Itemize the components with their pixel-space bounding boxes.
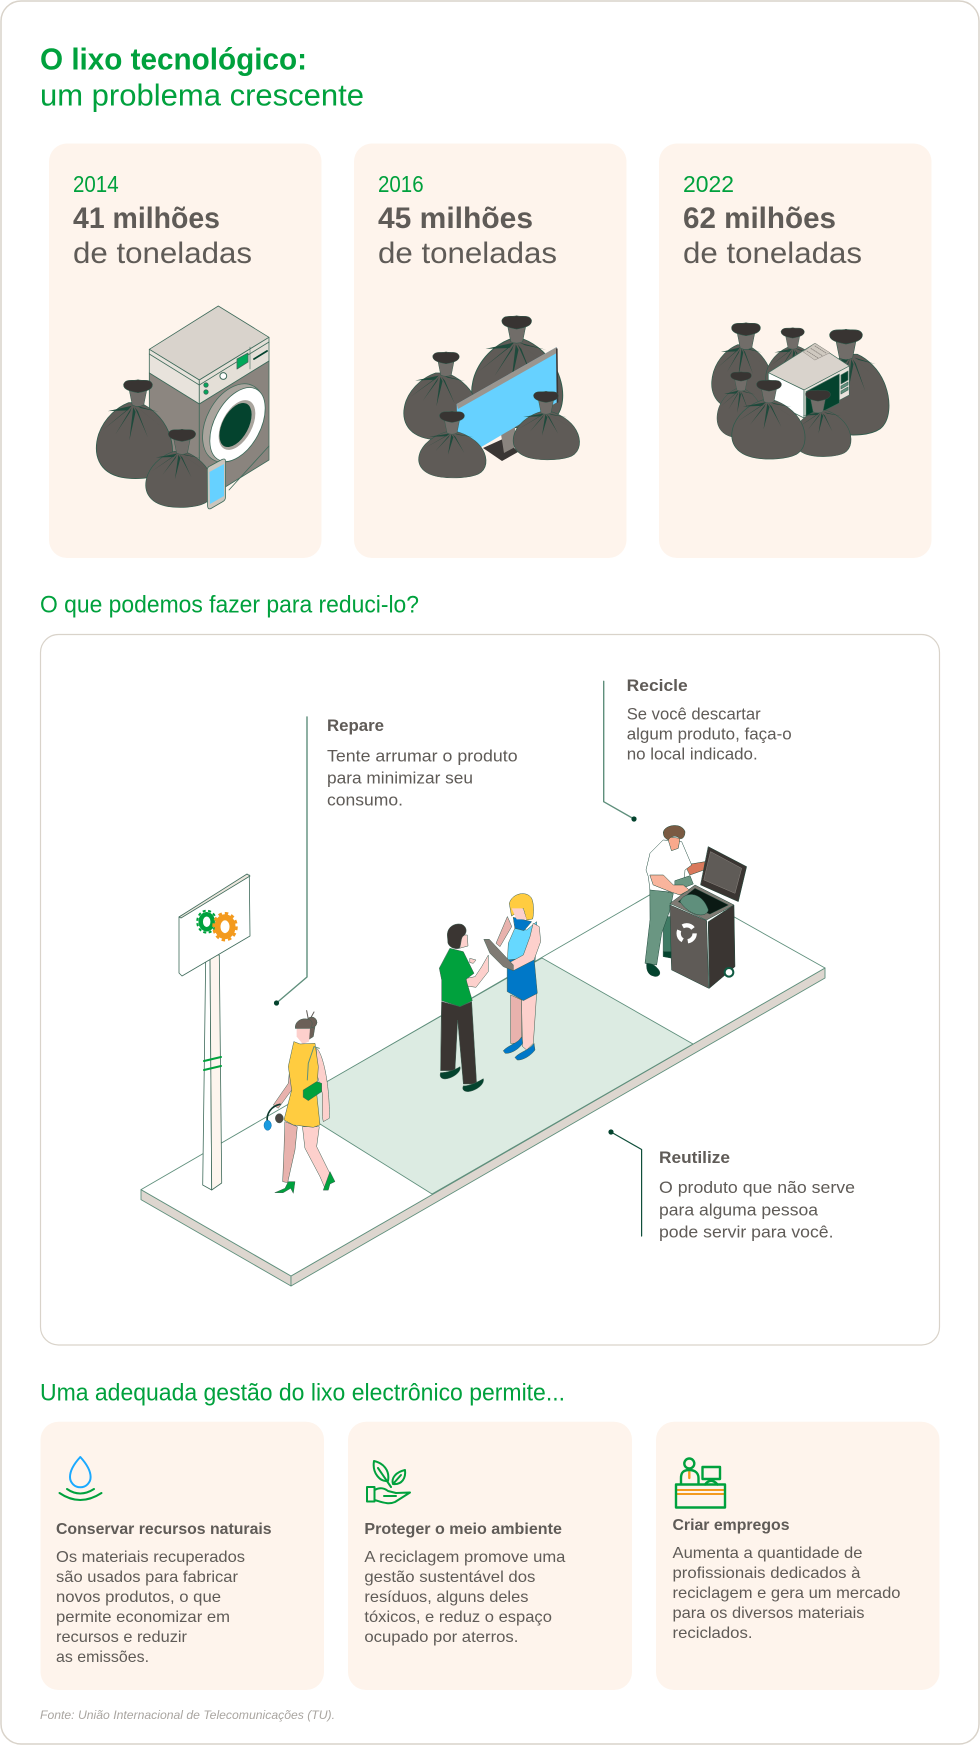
callout: repare: consumo. [327, 790, 403, 810]
callout: repare: para minimizar seu [327, 768, 473, 788]
woman with tablet [484, 894, 541, 1060]
heading: gestão: Uma adequada gestão do lixo electrônico permite... [40, 1380, 565, 1406]
bag [96, 380, 173, 479]
callout: repare: Repare [327, 716, 384, 735]
callout: repare [274, 716, 518, 1006]
panel: 2014: de toneladas [73, 237, 252, 270]
panel: 2016 [354, 144, 626, 558]
panel: conservar recursos: recursos e reduzir [56, 1629, 188, 1646]
heading: o que podemos fazer: O que podemos fazer para reduci-lo? [40, 592, 419, 618]
panel: criar empregos [656, 1422, 940, 1690]
panel: criar empregos: Criar empregos [672, 1517, 790, 1534]
panel: 2022: 62 milhões [683, 202, 836, 235]
callout: reutilize: Reutilize [659, 1148, 730, 1167]
bag [146, 429, 213, 507]
icon: headphones [264, 1104, 283, 1130]
panel: proteger meio ambiente: tóxicos, e reduz o espaço [364, 1609, 552, 1626]
panel: proteger meio ambiente: A reciclagem promove uma [364, 1549, 566, 1566]
panel: 2016: 45 milhões [378, 202, 533, 235]
illustration: woman in yellow dress [264, 1011, 335, 1193]
illustration: sign post [179, 874, 250, 1190]
source note: Fonte: União Internacional de Telecomunicações (TU). [40, 1708, 335, 1722]
icon: gears [197, 911, 236, 940]
man in green shirt [439, 924, 488, 1092]
illustration: microwave with bags [712, 323, 889, 459]
panel: 2022: de toneladas [683, 237, 862, 270]
panel: 2022 [659, 144, 932, 558]
recycling bin [650, 847, 747, 988]
platform [141, 882, 825, 1286]
panel: 2014 [49, 144, 322, 558]
title: um problema crescente [40, 78, 364, 112]
panel: criar empregos: Aumenta a quantidade de [672, 1545, 863, 1562]
icon: hand with plant [367, 1461, 410, 1503]
icon: phone [207, 459, 226, 509]
panel: proteger meio ambiente [348, 1422, 632, 1690]
callout: recicle: algum produto, faça-o [627, 724, 792, 744]
illustration: monitor with bags [404, 316, 580, 478]
panel: conservar recursos [40, 1422, 324, 1690]
panel: conservar recursos: as emissões. [56, 1649, 149, 1666]
illustration: two people talking [439, 894, 541, 1092]
callout: recicle: Recicle [627, 676, 688, 695]
panel: conservar recursos: Conservar recursos naturais [56, 1521, 272, 1538]
icon: person at desk [676, 1458, 725, 1508]
panel: criar empregos: reciclagem e gera um mercado [672, 1585, 901, 1602]
callout: reutilize: para alguma pessoa [659, 1200, 819, 1220]
panel: proteger meio ambiente: Proteger o meio ambiente [364, 1521, 562, 1538]
title: O lixo tecnológico: [40, 42, 307, 76]
panel: 2016: de toneladas [378, 237, 557, 270]
panel: conservar recursos: novos produtos, o que [56, 1589, 221, 1606]
illustration: man and recycling bin [645, 825, 747, 988]
panel: proteger meio ambiente: resíduos, alguns deles [364, 1589, 528, 1606]
callout: reutilize: O produto que não serve [659, 1178, 855, 1197]
green zone [288, 958, 693, 1194]
title [40, 42, 364, 112]
panel: criar empregos: reciclados. [672, 1625, 752, 1642]
callout: recicle: Se você descartar [627, 704, 761, 724]
panel: criar empregos: para os diversos materiais [672, 1605, 864, 1622]
callout: reutilize: pode servir para você. [659, 1222, 834, 1242]
illustration: washing machine with bags and phone [149, 306, 277, 503]
callout: repare: Tente arrumar o produto [327, 746, 518, 766]
panel: proteger meio ambiente: ocupado por aterros. [364, 1629, 518, 1646]
panel: 2014: 2014 [73, 171, 119, 197]
callout: recicle [604, 676, 792, 822]
panel: conservar recursos: são usados para fabricar [56, 1569, 239, 1586]
icon: water drop [60, 1457, 102, 1500]
callout: reutilize [608, 1129, 855, 1242]
panel: criar empregos: profissionais dedicados à [672, 1565, 861, 1582]
panel: 2022: 2022 [683, 171, 734, 197]
callout: recicle: no local indicado. [627, 744, 758, 764]
panel: 2016: 2016 [378, 171, 424, 197]
panel: proteger meio ambiente: gestão sustentável dos [364, 1569, 535, 1586]
panel: conservar recursos: permite economizar em [56, 1609, 230, 1626]
panel: conservar recursos: Os materiais recuperados [56, 1549, 245, 1566]
panel: 2014: 41 milhões [73, 202, 220, 235]
panel: scene [40, 634, 940, 1345]
